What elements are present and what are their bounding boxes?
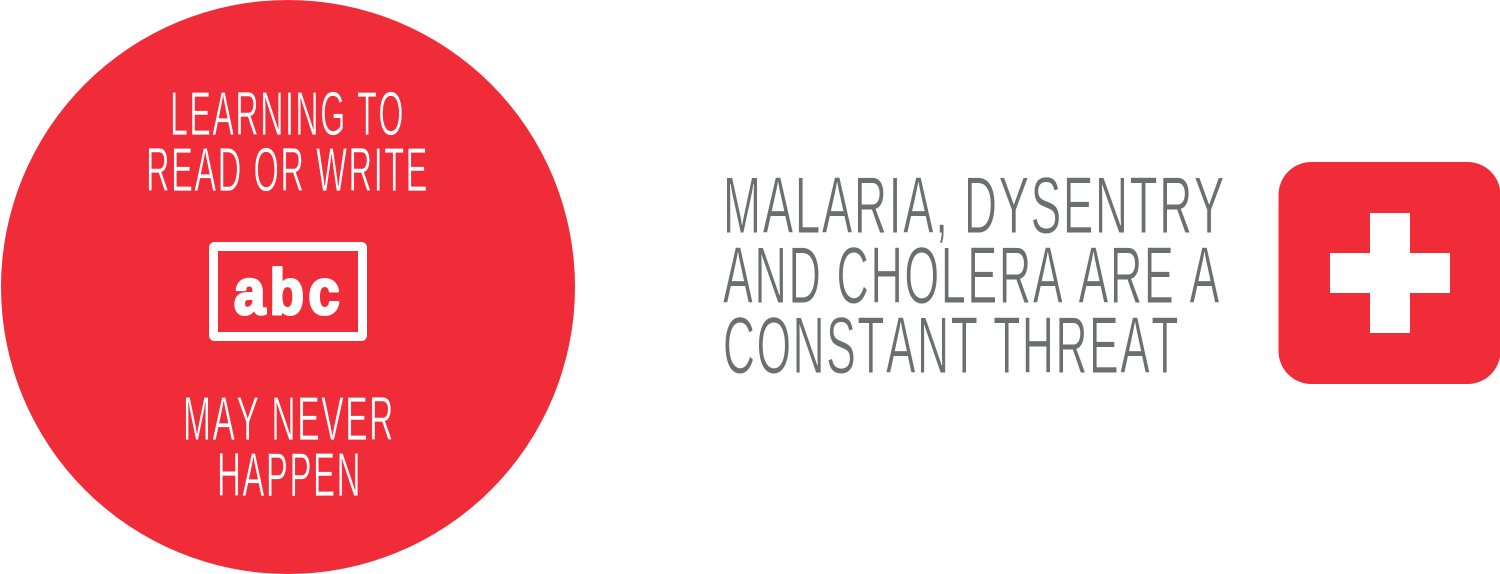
panel: red circle about literacy [1,0,575,574]
text: may never happen [183,384,395,510]
heading: learning to read or write: LEARNING TO [170,79,405,149]
text: may never happen: MAY NEVER [183,384,395,454]
icon: medical cross [1278,162,1500,384]
heading: learning to read or write: READ OR WRITE [146,135,429,205]
icon: abc slate: abc [234,256,344,328]
icon: abc slate [214,246,362,336]
text: may never happen: HAPPEN [217,440,362,510]
heading: learning to read or write [146,79,429,205]
text block: disease threat statement [723,161,1226,391]
